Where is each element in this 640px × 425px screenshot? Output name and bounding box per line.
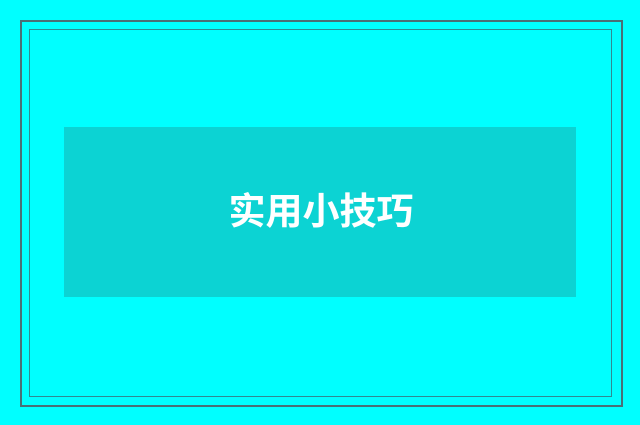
title: 实用小技巧 [228,191,414,232]
inner border frame [29,29,612,397]
panel: title banner [64,127,576,297]
